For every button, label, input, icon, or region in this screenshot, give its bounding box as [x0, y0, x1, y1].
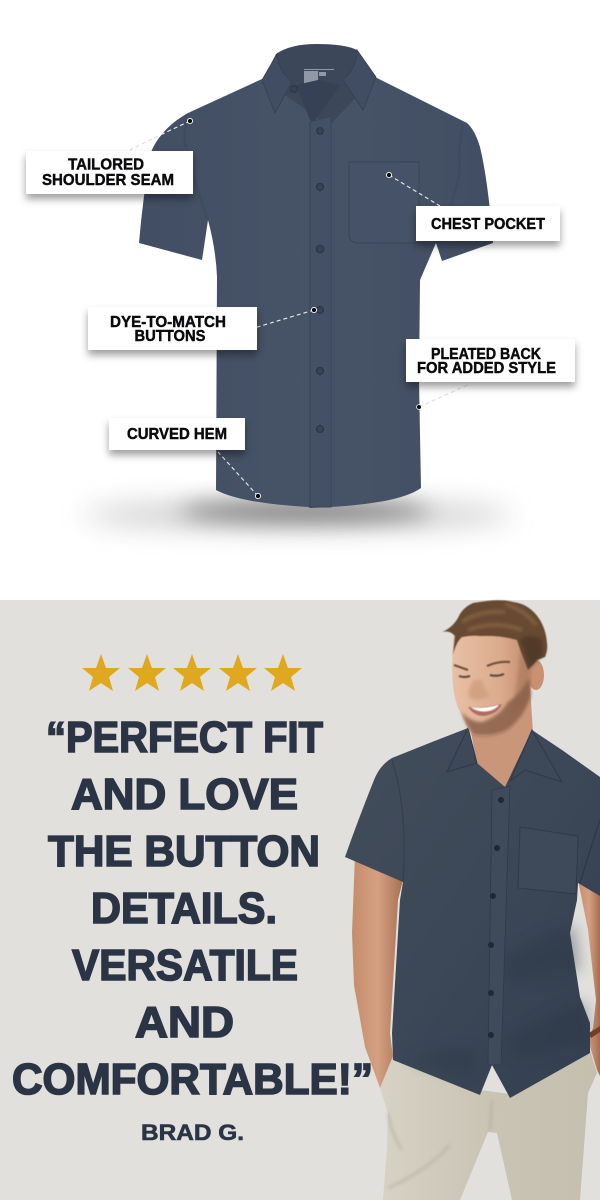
right arm — [578, 880, 600, 1076]
label: dye-to-match buttons: DYE-TO-MATCH — [110, 314, 226, 331]
ear — [528, 660, 544, 690]
placket — [488, 786, 510, 1065]
hair highlights — [462, 604, 536, 630]
review quote: COMFORTABLE!” — [12, 1056, 373, 1104]
review quote — [12, 714, 373, 1104]
label: curved hem — [109, 418, 245, 450]
inner placket gap — [296, 80, 340, 122]
top white background — [0, 0, 600, 600]
cheek shadow — [512, 650, 530, 712]
label: pleated back: FOR ADDED STYLE — [417, 360, 556, 377]
eyes and brows — [454, 662, 510, 677]
buttons — [488, 797, 504, 1038]
hair dark side — [520, 636, 543, 668]
review quote: DETAILS. — [91, 885, 277, 933]
trouser crease — [388, 1100, 492, 1188]
placket — [310, 116, 331, 507]
pocket — [518, 827, 578, 894]
review quote: AND — [135, 999, 234, 1047]
label: dye-to-match buttons: BUTTONS — [134, 328, 206, 345]
nose shadow — [469, 680, 490, 700]
review quote: AND LOVE — [71, 771, 298, 819]
label: dye-to-match buttons — [88, 307, 257, 350]
callout line: buttons — [254, 307, 317, 328]
collar left — [262, 54, 292, 113]
shirt back neck — [262, 44, 374, 130]
five star rating — [82, 654, 302, 691]
review quote: VERSATILE — [72, 942, 298, 990]
buttons — [291, 86, 324, 433]
left arm — [352, 855, 404, 1088]
label: tailored shoulder seam — [26, 151, 193, 194]
callout line: pleated back — [417, 384, 470, 409]
collar right — [343, 50, 376, 110]
review quote: THE BUTTON — [48, 828, 320, 876]
label: pleated back: PLEATED BACK — [431, 346, 542, 363]
callout line: chest pocket — [386, 172, 440, 206]
label: chest pocket: CHEST POCKET — [431, 216, 545, 233]
smile — [468, 704, 502, 716]
review quote: “PERFECT FIT — [46, 714, 323, 762]
beard — [462, 678, 531, 736]
trousers — [380, 1050, 597, 1200]
callout line: shoulder seam — [130, 118, 193, 150]
watch strap — [589, 1026, 600, 1038]
neck label — [304, 69, 334, 85]
label: chest pocket — [416, 206, 560, 241]
callout line: curved hem — [218, 452, 261, 499]
label: tailored shoulder seam: TAILORED — [68, 156, 144, 174]
hair — [442, 600, 547, 670]
product shirt — [139, 44, 493, 508]
shirt — [345, 728, 600, 1098]
face — [452, 628, 532, 736]
pocket — [349, 162, 419, 243]
collar — [447, 728, 562, 782]
photo: smiling man in shirt — [345, 600, 600, 1200]
neck — [470, 685, 534, 790]
reviewer name: BRAD G. — [141, 1120, 244, 1145]
review panel background — [0, 600, 600, 1200]
sleeve seam — [392, 760, 404, 882]
sleeve and side folds — [184, 114, 463, 243]
shirt fold shadows — [410, 925, 590, 1075]
label: curved hem: CURVED HEM — [127, 426, 227, 443]
label: tailored shoulder seam: SHOULDER SEAM — [42, 172, 174, 189]
ground shadow under shirt — [83, 500, 513, 526]
label: pleated back — [406, 339, 575, 382]
shirt body and sleeves — [139, 77, 493, 508]
right sleeve edge — [580, 820, 600, 883]
